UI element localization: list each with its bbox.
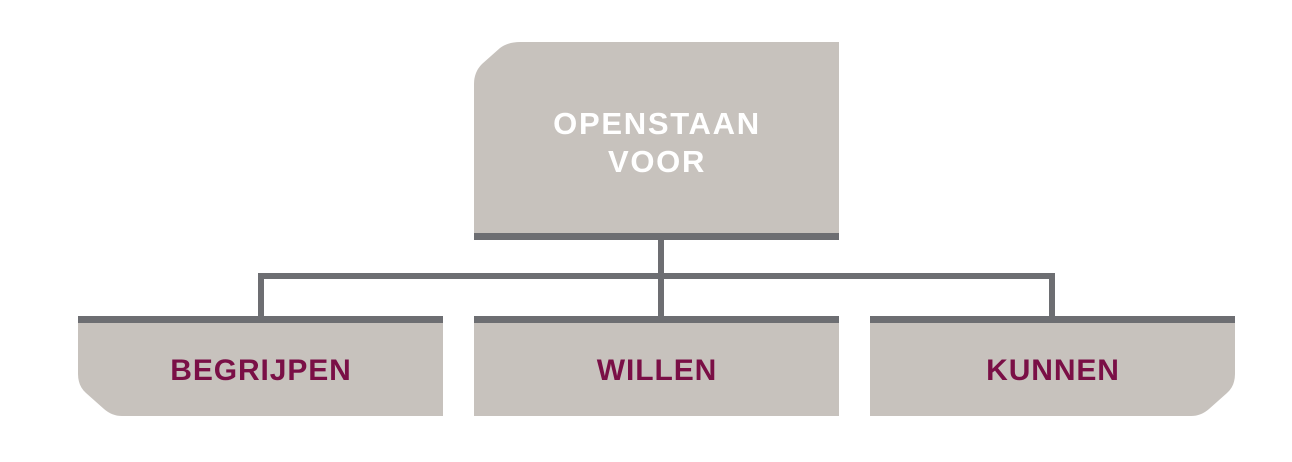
panel: begrijpen xyxy=(78,316,443,416)
panel: willen xyxy=(474,316,839,416)
heading: openstaan voor: VOOR xyxy=(608,144,706,179)
panel: kunnen xyxy=(870,316,1235,416)
label: begrijpen: BEGRIJPEN xyxy=(170,354,352,387)
label: kunnen: KUNNEN xyxy=(986,354,1120,387)
label: willen: WILLEN xyxy=(597,354,717,387)
connector lines xyxy=(258,240,1055,318)
panel: openstaan voor xyxy=(474,42,839,240)
heading: openstaan voor: OPENSTAAN xyxy=(553,106,761,141)
